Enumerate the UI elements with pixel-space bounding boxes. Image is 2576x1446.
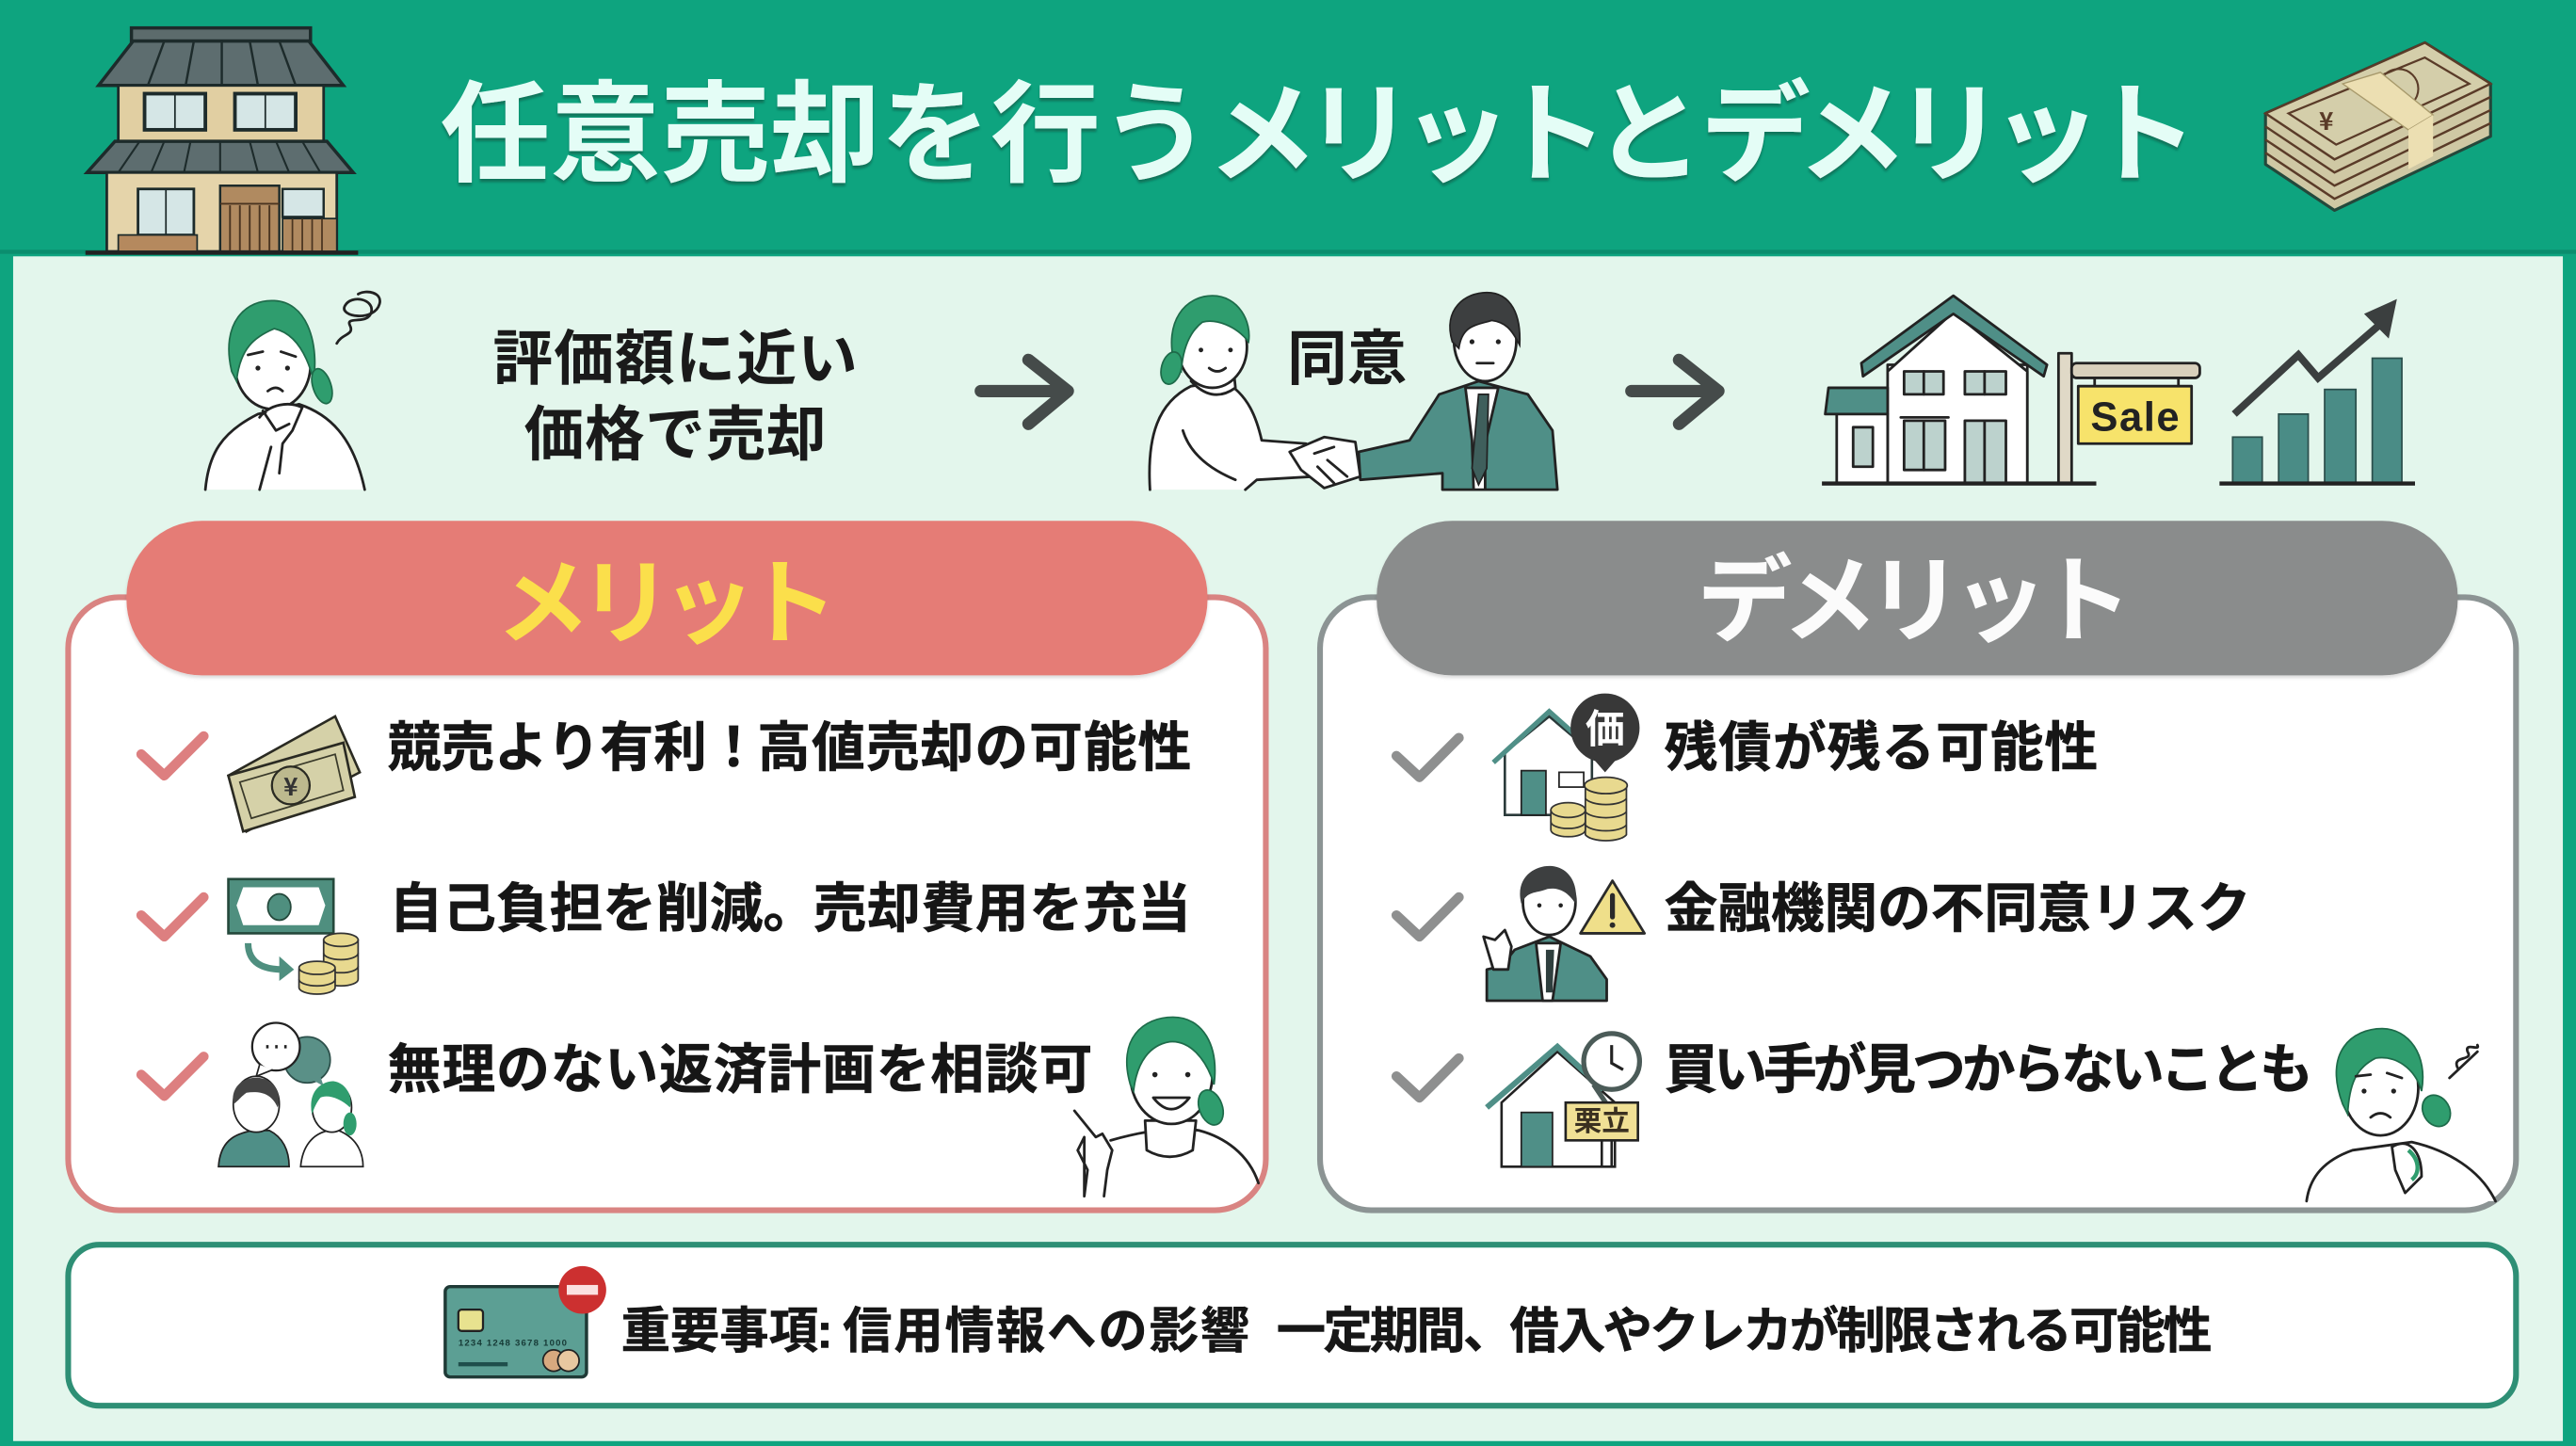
text: 自己負担を削減。 [390,865,816,942]
flow: step three house and chart [1822,296,2415,486]
text: 金融機関の不同意リスク [1665,865,2251,942]
text: 高値売却の可能性 [757,704,1192,781]
merit item 2 [141,865,1191,994]
icon: house with debt and coins: 価 [1586,698,1625,755]
header band [0,0,2576,255]
bar chart with rising arrow [2219,299,2415,486]
icon: house with clock and sign [1487,1034,1639,1166]
merits heading pill [126,521,1207,675]
flow: step one [205,292,858,490]
icon: money and coins [229,879,358,994]
illustration: house with sale sign: Sale [2090,394,2180,440]
text: credit notice: 一定期間、借入やクレカが制限される可能性 [1277,1291,2211,1362]
icon: banker with warning [1484,866,1645,1001]
icon: thought squiggle [337,292,380,344]
panel: merits [68,521,1265,1211]
demerit item 2 [1396,865,2251,1001]
text: 競売より有利！ [388,704,761,781]
text: credit notice: : [816,1304,833,1358]
text: credit notice: 信用情報への影響 [843,1291,1251,1362]
icon: stack of banknotes [2265,42,2490,210]
demerit item 1 [1396,694,2098,841]
demerits heading pill [1377,521,2457,675]
illustration: woman [1150,296,1314,490]
title: と [1594,44,1703,204]
text: consent: 同意 [1287,311,1408,397]
text: 残債が残る可能性 [1665,704,2098,781]
check mark [1396,1058,1458,1098]
arrow [1632,360,1718,424]
demerits heading pill: デメリット [1697,525,2133,663]
check mark [141,1056,203,1096]
title: メリット [1207,44,1595,204]
icon: consultation [218,1023,363,1166]
panel: important notice [68,1245,2516,1406]
illustration: house with sale sign [1822,296,2199,486]
icon: banknotes: ¥ [283,767,298,803]
demerit item 3 [1396,1026,2313,1166]
title: デメリット [1700,44,2185,204]
icon: credit card with stop sign [445,1266,606,1377]
text: near appraisal price: 価格で売却 [524,386,827,473]
check mark [1396,738,1458,778]
icon: credit card with stop sign: 1234 1248 3678 1000 [459,1339,567,1349]
check mark [1396,897,1458,937]
illustration: worried woman [205,292,380,490]
text: 無理のない返済計画を相談可 [388,1026,1092,1103]
icon: house with clock and sign: 栗立 [1574,1099,1630,1139]
text: credit notice: 重要事項 [621,1291,818,1362]
text: 買い手が見つからないことも [1665,1026,2313,1103]
merit item 1 [141,704,1192,831]
flow: step two handshake [1150,293,1557,490]
title: 任意売却を行う [441,44,1211,204]
illustration: businessman [1290,293,1557,490]
check mark [141,897,203,937]
text: near appraisal price [492,311,858,473]
arrow [981,360,1068,424]
icon: handshake [1290,437,1360,488]
merits heading pill: メリット [496,527,838,663]
icon: japanese house [86,28,358,255]
illustration: smiling woman pointing [1074,1017,1259,1197]
merit item 3 [141,1023,1092,1166]
icon: banknotes [229,716,360,831]
text: near appraisal price: 評価額に近い [492,311,858,397]
check mark [141,736,203,776]
panel: demerits [1320,521,2516,1211]
icon: stack of banknotes: ¥ [2319,102,2333,137]
text: 売却費用を充当 [813,865,1191,942]
icon: house with debt and coins [1493,694,1639,841]
illustration: troubled woman [2307,1029,2495,1201]
